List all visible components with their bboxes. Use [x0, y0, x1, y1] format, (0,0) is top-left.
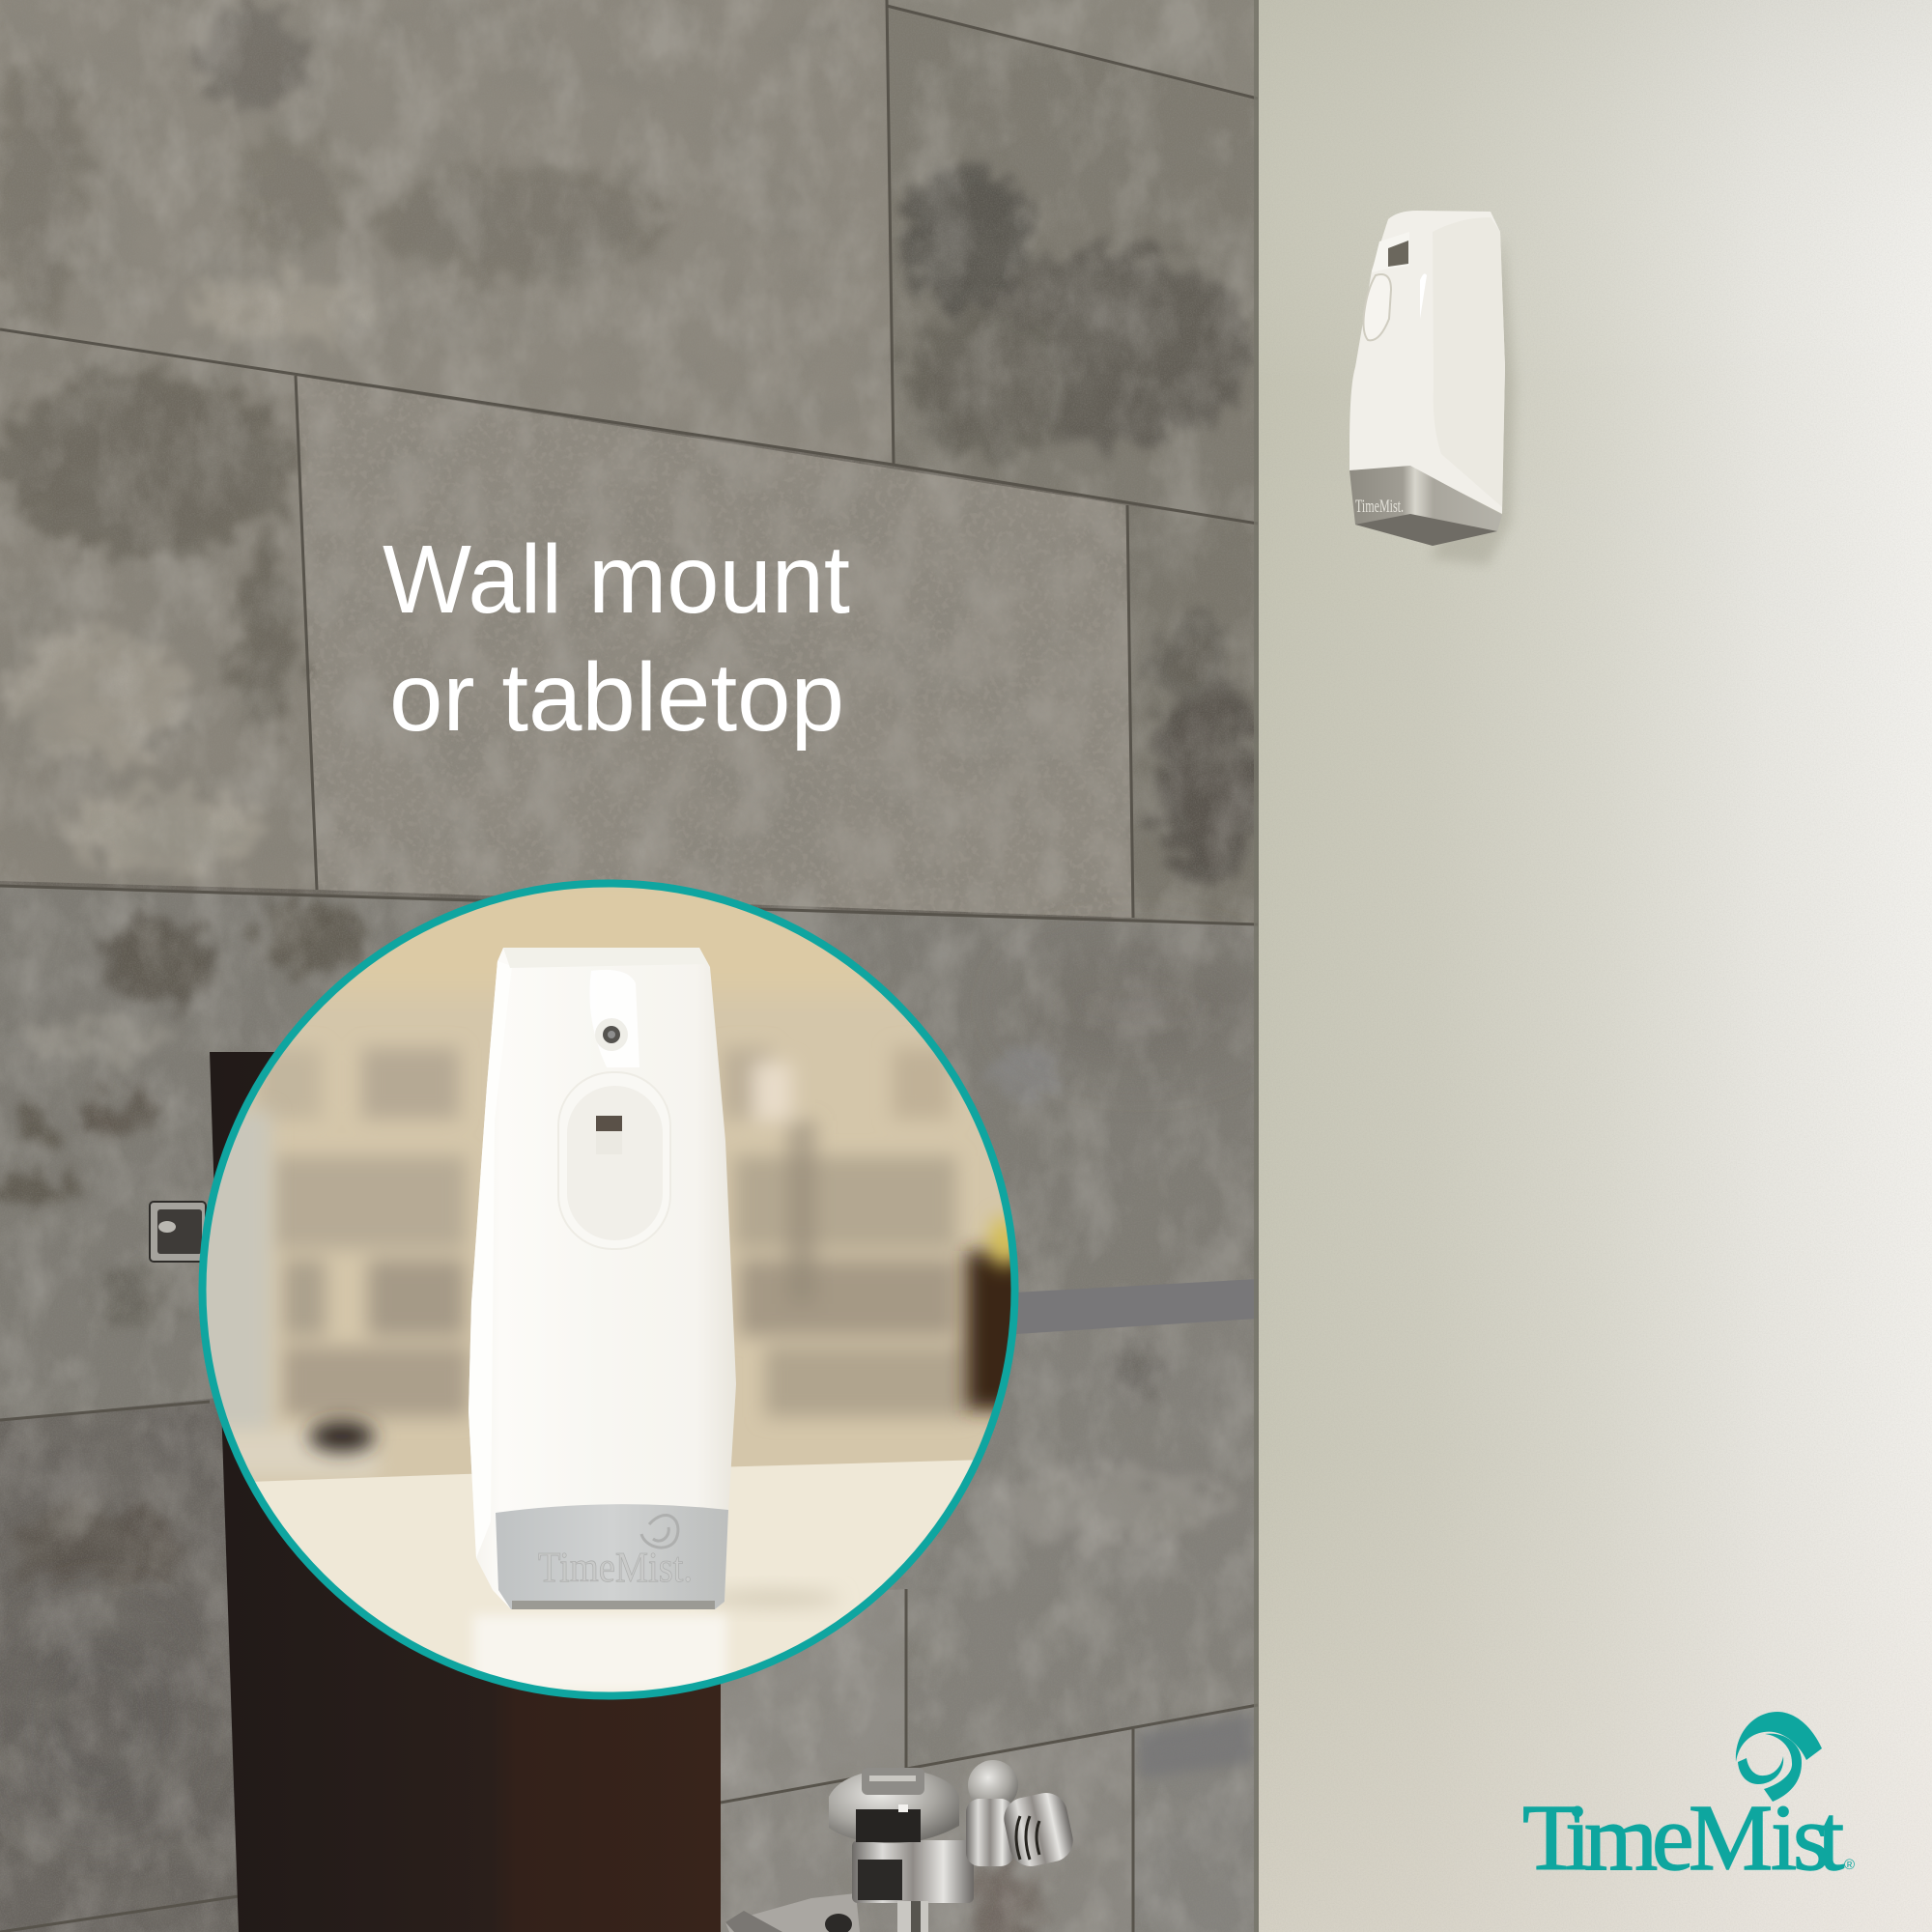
dispenser silver base — [496, 1504, 728, 1609]
inset teal ring — [203, 883, 1014, 1696]
dispenser shell — [469, 948, 736, 1609]
valve inlet pipe — [725, 1893, 860, 1932]
heading: wall mount or tabletop — [383, 526, 850, 752]
icon: door latch — [150, 1202, 206, 1262]
dispenser button — [1364, 274, 1391, 340]
stone patches — [0, 10, 1261, 1932]
dispenser lcd window — [1372, 232, 1409, 272]
inset white dispenser — [469, 948, 736, 1609]
valve lower body — [852, 1840, 974, 1903]
gray stone band — [1014, 1279, 1258, 1334]
heading: wall mount or tabletop: Wall mount — [383, 526, 850, 634]
dispenser shadow — [1430, 232, 1515, 565]
dispenser sensor — [595, 1018, 628, 1051]
dispenser silver base: TimeMist. — [538, 1544, 693, 1591]
icon: logo swirl — [1736, 1712, 1822, 1802]
logo registered mark: ® — [1844, 1857, 1855, 1873]
panel: circular tabletop inset — [184, 869, 1034, 1710]
blue-gray tile — [1142, 1717, 1252, 1774]
panel: dark door — [210, 1052, 721, 1932]
dispenser button — [558, 1072, 670, 1249]
valve side handle — [968, 1760, 1018, 1810]
panel: stone tile wall — [0, 0, 1265, 1932]
inset countertop — [193, 1459, 1024, 1710]
heading: wall mount or tabletop: or tabletop — [389, 643, 844, 752]
icon: chrome flush valve — [725, 1760, 1077, 1932]
dispenser body — [1350, 211, 1505, 514]
logo wordmark: TimeMist — [1522, 1786, 1844, 1890]
valve dome — [829, 1768, 959, 1843]
inset blurred backdrop — [184, 869, 1034, 1700]
icon: wall-mounted dispenser — [1350, 211, 1515, 565]
logo: TimeMist — [1522, 1712, 1855, 1890]
dispenser silver base: TimeMist. — [1355, 497, 1404, 517]
panel: right plaster wall — [1254, 0, 1932, 1932]
dispenser silver base — [1350, 466, 1502, 546]
